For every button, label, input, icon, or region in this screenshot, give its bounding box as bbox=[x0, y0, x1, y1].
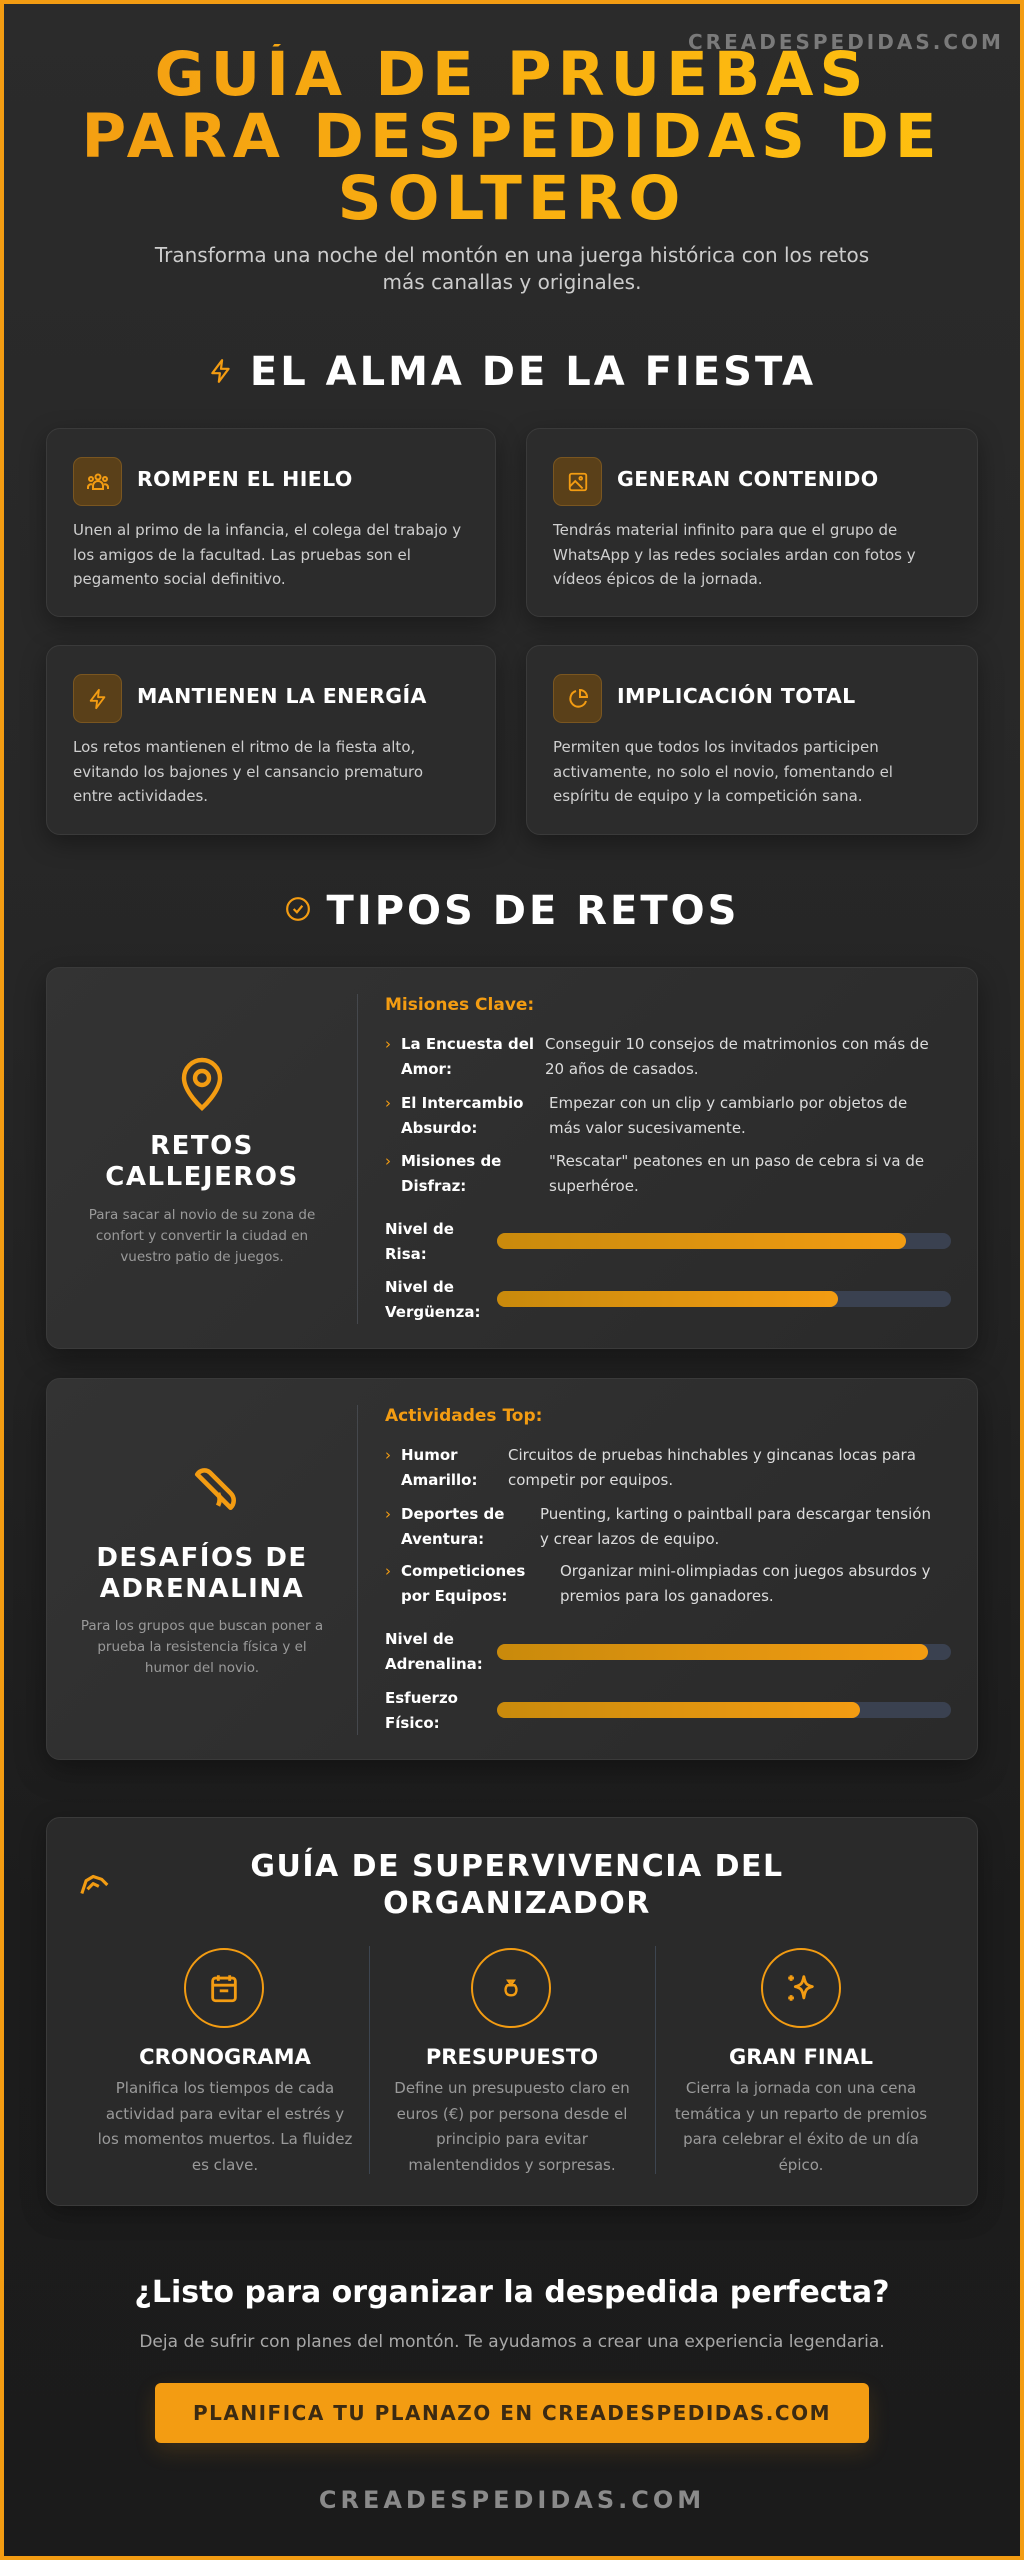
panel title: GUÍA DE SUPERVIVENCIA DEL bbox=[250, 1849, 784, 1884]
item 1: Circuitos de pruebas hinchables y gincanas locas para competir por equipos. bbox=[508, 1446, 916, 1488]
column text: Cierra la jornada con una cena temática y un reparto de premios para celebrar el éxito de un día épico. bbox=[675, 2079, 927, 2174]
item 2: › bbox=[385, 1505, 391, 1523]
panel: guia de supervivencia bbox=[46, 1817, 978, 2206]
icon: handshake bbox=[80, 1874, 108, 1894]
item 1: Conseguir 10 consejos de matrimonios con más de 20 años de casados. bbox=[545, 1035, 929, 1078]
item 2: El Intercambio Absurdo: bbox=[401, 1094, 523, 1136]
left title: DESAFÍOS DE bbox=[96, 1543, 308, 1573]
list heading: Misiones Clave: bbox=[385, 995, 534, 1015]
column: presupuesto bbox=[394, 1948, 630, 2174]
icon: image bbox=[553, 457, 602, 506]
item 3: Competiciones por Equipos: bbox=[401, 1562, 525, 1604]
list heading: Actividades Top: bbox=[385, 1406, 542, 1426]
left text: Para sacar al novio de su zona de confort y convertir la ciudad en vuestro patio de juegos. bbox=[89, 1207, 315, 1265]
column title: PRESUPUESTO bbox=[426, 2045, 598, 2069]
bar: risa bbox=[385, 1220, 951, 1262]
heading: tipos de retos: TIPOS DE RETOS bbox=[327, 888, 739, 934]
panel: retos callejeros: Vergüenza: bbox=[385, 1302, 480, 1320]
panel: retos callejeros: Risa: bbox=[385, 1244, 427, 1262]
card: implicacion total bbox=[526, 645, 978, 835]
item 2: Deportes de Aventura: bbox=[401, 1505, 504, 1548]
left title: RETOS bbox=[150, 1131, 254, 1161]
icon: money bag bbox=[471, 1948, 551, 2028]
card title: MANTIENEN LA ENERGÍA bbox=[137, 684, 427, 708]
subtitle: más canallas y originales. bbox=[383, 270, 641, 294]
card text: Unen al primo de la infancia, el colega del trabajo y los amigos de la facultad. Las pruebas son el pegamento social definitivo. bbox=[73, 521, 461, 588]
card title: IMPLICACIÓN TOTAL bbox=[617, 684, 856, 708]
column text: Planifica los tiempos de cada actividad para evitar el estrés y los momentos muertos. La fluidez es clave. bbox=[98, 2079, 352, 2174]
item 3 bbox=[385, 1152, 924, 1194]
panel: retos callejeros bbox=[46, 967, 978, 1349]
card: rompen el hielo bbox=[46, 428, 496, 617]
panel: desafios de adrenalina: Esfuerzo bbox=[385, 1689, 458, 1707]
item 3: › bbox=[385, 1152, 391, 1170]
icon: map pin bbox=[182, 1058, 222, 1111]
subtitle bbox=[154, 243, 869, 294]
item 3: Organizar mini-olimpiadas con juegos absurdos y premios para los ganadores. bbox=[560, 1562, 931, 1604]
panel: desafios de adrenalina: Adrenalina: bbox=[385, 1654, 483, 1672]
left title: CALLEJEROS bbox=[105, 1162, 299, 1192]
item 3 bbox=[385, 1562, 931, 1604]
subtitle: Transforma una noche del montón en una juerga histórica con los retos bbox=[155, 243, 869, 267]
item 2 bbox=[385, 1094, 907, 1136]
item 3: "Rescatar" peatones en un paso de cebra si va de superhéroe. bbox=[549, 1152, 924, 1194]
card: mantienen la energia bbox=[46, 645, 496, 835]
item 2: Puenting, karting o paintball para descargar tensión y crear lazos de equipo. bbox=[540, 1505, 931, 1548]
icon: bolt bbox=[73, 674, 122, 723]
icon: parachute bbox=[194, 1468, 236, 1510]
icon: pie bbox=[553, 674, 602, 723]
panel title bbox=[250, 1848, 784, 1921]
item 1: La Encuesta del Amor: bbox=[401, 1035, 534, 1078]
item 1: › bbox=[385, 1446, 391, 1464]
item 1: Humor Amarillo: bbox=[401, 1446, 478, 1488]
card title: ROMPEN EL HIELO bbox=[137, 467, 353, 491]
title: GUÍA DE PRUEBAS bbox=[155, 39, 869, 110]
icon: sparkles bbox=[761, 1948, 841, 2028]
heading: el alma de la fiesta: EL ALMA DE LA FIESTA bbox=[250, 349, 816, 395]
column: gran final bbox=[675, 1948, 927, 2174]
bar: verguenza bbox=[385, 1278, 951, 1320]
panel: retos callejeros: Nivel de bbox=[385, 1278, 454, 1296]
item 3: › bbox=[385, 1562, 391, 1580]
item 2: › bbox=[385, 1094, 391, 1112]
icon: group bbox=[73, 457, 122, 506]
item 2: Empezar con un clip y cambiarlo por objetos de más valor sucesivamente. bbox=[549, 1094, 907, 1136]
panel: retos callejeros: Nivel de bbox=[385, 1220, 454, 1238]
left title: ADRENALINA bbox=[100, 1574, 304, 1604]
title bbox=[0, 44, 1024, 230]
icon: calendar bbox=[184, 1948, 264, 2028]
cta heading: ¿Listo para organizar la despedida perfecta? bbox=[134, 2275, 890, 2310]
card text: Los retos mantienen el ritmo de la fiesta alto, evitando los bajones y el cansancio prematuro entre actividades. bbox=[73, 738, 423, 805]
column title: CRONOGRAMA bbox=[139, 2045, 311, 2069]
cta button bbox=[155, 2383, 869, 2443]
card title: GENERAN CONTENIDO bbox=[617, 467, 879, 491]
cta text: Deja de sufrir con planes del montón. Te ayudamos a crear una experiencia legendaria. bbox=[139, 2332, 885, 2352]
column: cronograma bbox=[98, 1948, 352, 2174]
panel: desafios de adrenalina: Nivel de bbox=[385, 1630, 454, 1648]
watermark: CREADESPEDIDAS.COM bbox=[688, 30, 1004, 54]
card text: Tendrás material infinito para que el grupo de WhatsApp y las redes sociales ardan con fotos y vídeos épicos de la jornada. bbox=[553, 521, 916, 588]
left text: Para los grupos que buscan poner a prueba la resistencia física y el humor del novio. bbox=[81, 1618, 323, 1676]
left title bbox=[105, 1131, 299, 1192]
footer: CREADESPEDIDAS.COM bbox=[319, 2486, 705, 2514]
column text: Define un presupuesto claro en euros (€) por persona desde el principio para evitar malentendidos y sorpresas. bbox=[394, 2079, 630, 2174]
panel title: ORGANIZADOR bbox=[383, 1886, 651, 1921]
panel: desafios de adrenalina: Físico: bbox=[385, 1714, 440, 1732]
title: SOLTERO bbox=[338, 163, 686, 234]
bar: adrenalina bbox=[385, 1630, 951, 1672]
card text: Permiten que todos los invitados participen activamente, no solo el novio, fomentando el espíritu de equipo y la competición sana. bbox=[553, 738, 893, 805]
left title bbox=[96, 1542, 308, 1604]
cta button: PLANIFICA TU PLANAZO EN CREADESPEDIDAS.COM bbox=[193, 2401, 831, 2425]
card: generan contenido bbox=[526, 428, 978, 617]
column title: GRAN FINAL bbox=[729, 2045, 873, 2069]
item 3: Misiones de Disfraz: bbox=[401, 1152, 501, 1194]
panel: desafios de adrenalina bbox=[46, 1378, 978, 1760]
item 1: › bbox=[385, 1035, 391, 1053]
bar: esfuerzo bbox=[385, 1689, 951, 1732]
title: PARA DESPEDIDAS DE bbox=[82, 101, 942, 172]
